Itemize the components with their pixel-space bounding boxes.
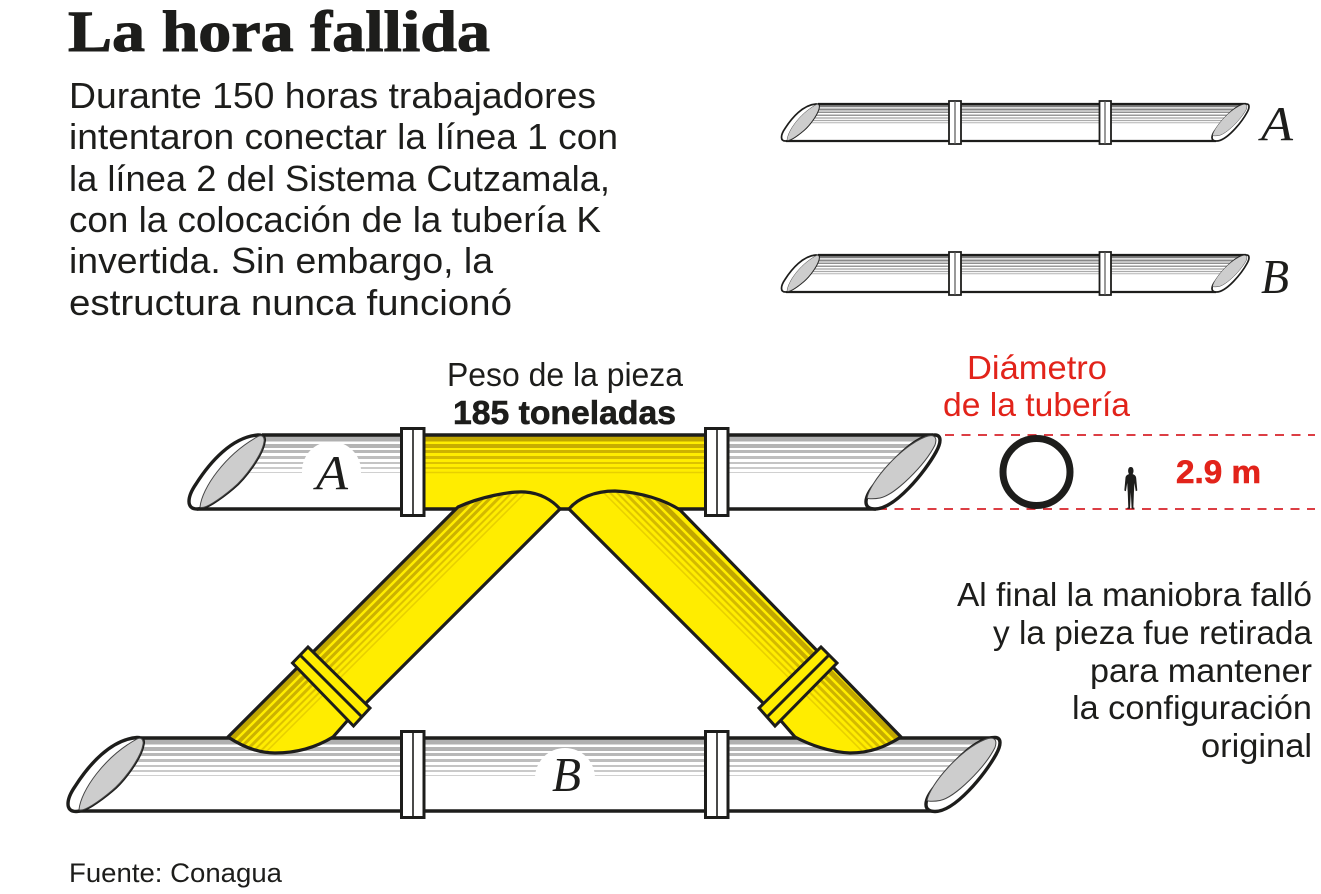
result text block: original (1201, 727, 1312, 764)
diameter label: Diámetro (967, 349, 1107, 386)
title: La hora fallida (68, 0, 490, 64)
label B: B (552, 747, 581, 802)
pipe cross-section circle (1003, 438, 1070, 506)
weight label: 185 toneladas (453, 394, 676, 431)
flange right (706, 732, 728, 818)
large pipe B (66, 730, 1002, 819)
result text block: y la pieza fue retirada (993, 614, 1313, 651)
label disc A (302, 442, 361, 507)
result text block (957, 576, 1313, 764)
label disc B (535, 748, 595, 808)
result text block: Al final la maniobra falló (957, 576, 1312, 613)
intro text block: con la colocación de la tubería K (69, 199, 601, 240)
result text block: la configuración (1072, 689, 1312, 726)
intro text block: la línea 2 del Sistema Cutzamala, (69, 158, 610, 199)
intro text block: invertida. Sin embargo, la (69, 240, 494, 281)
intro text block: estructura nunca funcionó (69, 282, 512, 323)
source: Fuente: Conagua (69, 858, 283, 888)
result text block: para mantener (1090, 652, 1312, 689)
flange left (402, 732, 424, 818)
intro text block (69, 75, 618, 323)
intro text block: intentaron conectar la línea 1 con (69, 116, 618, 157)
diameter value: 2.9 m (1176, 454, 1261, 490)
small pipe B (780, 251, 1250, 296)
dashed diameter guides (878, 435, 1315, 509)
diameter label: de la tubería (943, 386, 1131, 423)
left arm flange (292, 647, 370, 726)
small label B: B (1261, 249, 1289, 304)
yellow left arm (226, 490, 561, 755)
flange right (706, 428, 728, 516)
label A: A (313, 445, 349, 500)
small label A: A (1258, 96, 1294, 151)
large pipe A (187, 427, 942, 517)
right arm flange (759, 647, 837, 726)
diameter label (943, 349, 1131, 423)
yellow centre section (0, 435, 1321, 509)
yellow right arm (568, 489, 902, 755)
small pipe A (780, 100, 1250, 145)
flange left (402, 428, 424, 516)
intro text block: Durante 150 horas trabajadores (69, 75, 596, 116)
icon: human scale figure (1124, 467, 1137, 509)
weight label (447, 356, 684, 431)
weight label: Peso de la pieza (447, 356, 684, 393)
